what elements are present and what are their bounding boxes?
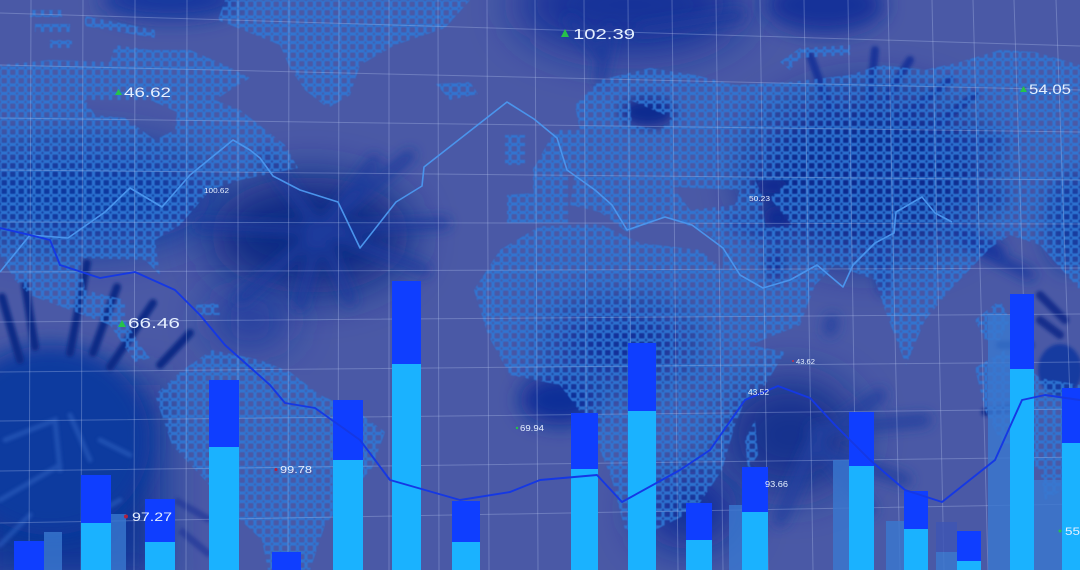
label: 69.94: 69.94 [520,424,545,433]
virus: far right [985,295,1080,412]
translucent background bars [44,315,1062,570]
virus: top left patch [100,0,240,20]
label: 46.62 [115,84,171,100]
label: 100.62: 100.62 [204,188,229,195]
line chart: light blue series [0,102,952,288]
virus: upper left haze [0,143,215,247]
virus: upper right large [730,50,1080,290]
map: madagascar [745,420,758,470]
label: 46.62: 46.62 [124,84,171,100]
label: cropped 55 [1058,526,1080,538]
line chart: dark blue series [0,228,1080,502]
label: 97.27 [124,510,172,524]
map: eurasia [533,50,1080,365]
map: britain and iberia [505,135,568,223]
label: 43.62: 43.62 [796,359,815,366]
label: 97.27: 97.27 [132,510,172,524]
virus: africa region [520,305,740,550]
virus: centre [200,155,445,345]
map: north america [0,45,298,362]
map: iceland and cuba [195,82,478,315]
map: greenland [218,0,470,108]
label: 99.78: 99.78 [280,465,313,476]
virus: inner sea shadows [754,179,792,281]
label: 66.46 [118,315,180,332]
bar series: upper segments [14,281,1080,570]
map: africa [474,224,785,530]
virus: lower left sharp cell [0,263,210,570]
virus: lower right [722,320,925,520]
label: 69.94 [516,424,545,433]
label: 99.78 [274,465,313,476]
label: 102.39 [561,26,635,43]
label: 54.05: 54.05 [1029,81,1071,97]
label: cropped 55: 55 [1065,526,1080,538]
label: 66.46: 66.46 [128,315,180,332]
label: 93.66: 93.66 [765,480,789,489]
map: indonesia and australia [975,300,1080,500]
map: arctic islands [30,10,850,70]
virus: top centre [515,0,885,127]
label: 102.39: 102.39 [573,26,635,43]
label: 43.52: 43.52 [748,388,770,397]
bar chart [14,281,1080,570]
map: south america [155,350,385,570]
label: 54.05 [1020,81,1071,97]
label: 50.23: 50.23 [749,196,770,203]
bar series: lower segments [81,364,1080,570]
